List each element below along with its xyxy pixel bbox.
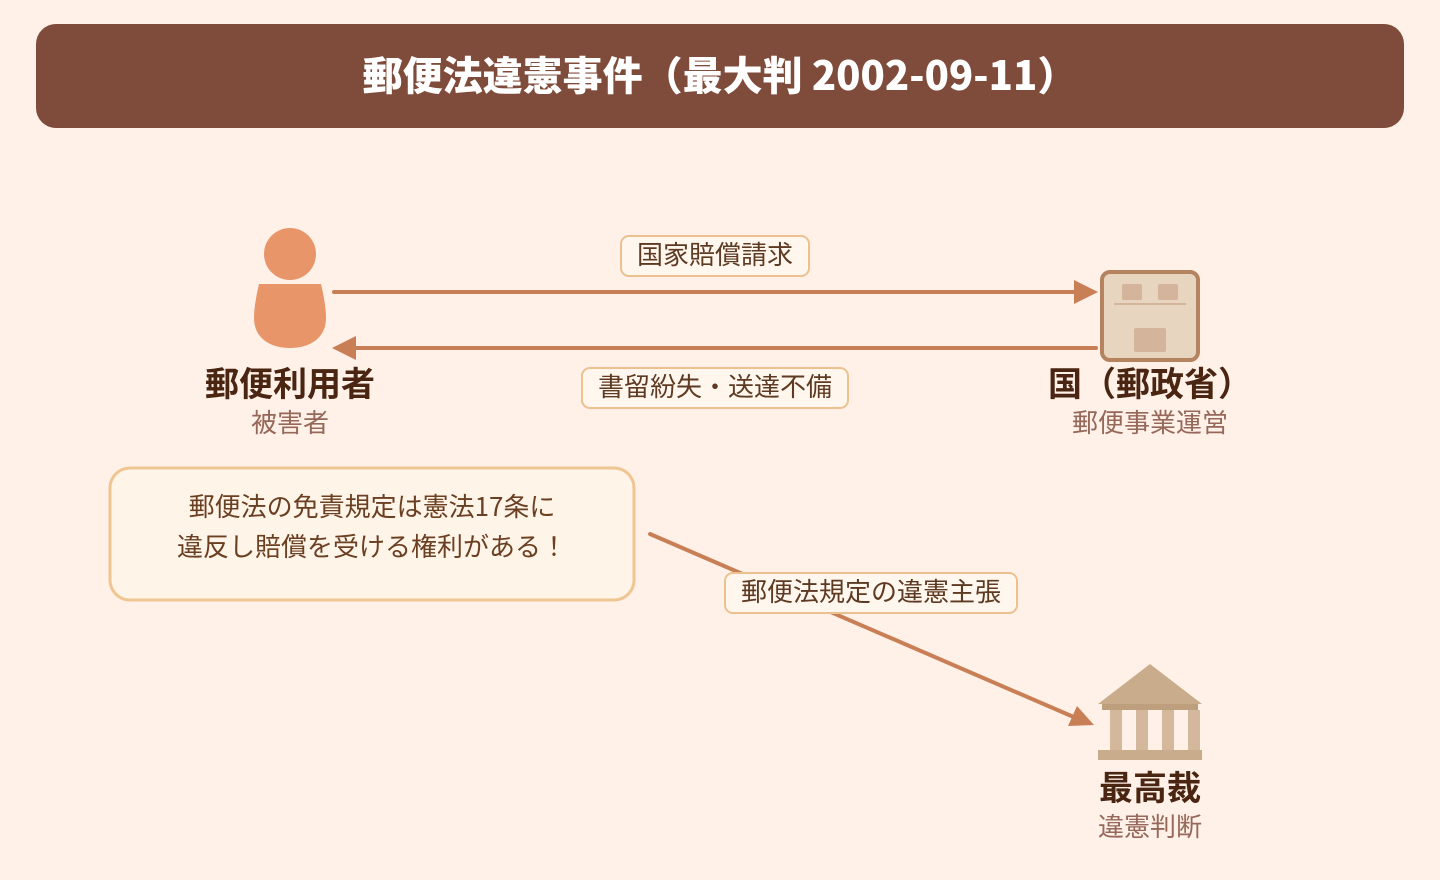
arrow: claim to state (332, 280, 1098, 304)
label: supreme court: 最高裁 (1099, 761, 1201, 810)
arrow: appeal to supreme court (648, 532, 1094, 726)
label: supreme court: 違憲判断 (1098, 807, 1202, 844)
icon: person (postal user) (254, 228, 326, 348)
icon: government building (1100, 270, 1200, 362)
label: state: 国（郵政省） (1048, 357, 1252, 406)
title banner (36, 24, 1404, 128)
label: postal user (205, 357, 375, 440)
callout: speech box: 郵便法の免責規定は憲法17条に (189, 487, 555, 524)
icon: supreme court (1098, 664, 1202, 760)
arrow: loss back to user (332, 336, 1098, 360)
label: state (1048, 357, 1252, 440)
label: supreme court (1098, 761, 1202, 844)
label: unconstitutional claim: 郵便法規定の違憲主張 (741, 572, 1001, 609)
title banner: 郵便法違憲事件（最大判 2002-09-11） (363, 44, 1077, 102)
label: postal user: 被害者 (251, 403, 329, 440)
label: lost registered mail: 書留紛失・送達不備 (598, 367, 832, 404)
callout: speech box (108, 466, 636, 602)
label: state: 郵便事業運営 (1072, 403, 1228, 440)
label: postal user: 郵便利用者 (205, 357, 375, 406)
callout: speech box: 違反し賠償を受ける権利がある！ (177, 527, 567, 564)
label: state compensation claim: 国家賠償請求 (637, 235, 793, 272)
